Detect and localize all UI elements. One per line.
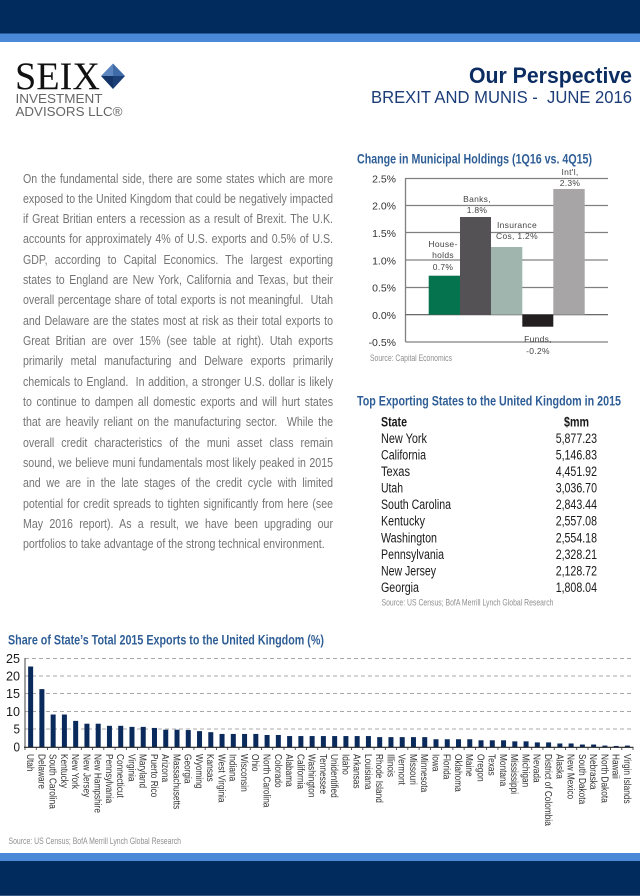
table: top exporting states: New York — [381, 431, 427, 446]
bar chart: change in municipal holdings: 2.3% — [560, 178, 580, 188]
bar chart: share of state exports: Kansas — [205, 754, 216, 782]
logo: Seix Investment Advisors — [15, 55, 125, 119]
table: top exporting states: Georgia — [381, 580, 419, 595]
bar chart: share of state exports: Tennessee — [318, 754, 328, 794]
body text — [23, 170, 333, 551]
table: top exporting states: Pennsylvania — [381, 547, 444, 562]
body text: primarily metal manufacturing and Delware exports primarily — [23, 353, 333, 368]
bar chart: share of state exports: 20 — [6, 670, 20, 684]
body text: and Delaware are the states most at risk as their total exports to — [23, 313, 333, 328]
bar chart: share of state exports: Mississippi — [509, 754, 520, 794]
bar chart: change in municipal holdings: -0.2% — [526, 346, 550, 356]
body text: overall percentage share of total exports is not meaningful. Utah — [23, 292, 333, 307]
bar chart: share of state exports: Alaska — [554, 754, 565, 780]
bar chart: change in municipal holdings: House- — [428, 239, 458, 249]
bar chart: share of state exports: 10 — [6, 705, 20, 719]
body text: GDP, according to Capital Economics. The largest exporting — [23, 252, 333, 267]
logo: Seix Investment Advisors: ADVISORS LLC® — [16, 105, 123, 119]
bar chart: share of state exports: 25 — [6, 652, 20, 666]
bar chart: share of state exports: Idaho — [340, 754, 351, 775]
bar chart: share of state exports: West Virginia — [216, 754, 227, 803]
bar chart: share of state exports: Maine — [464, 754, 475, 777]
table: top exporting states: New Jersey — [381, 563, 436, 578]
bar chart: share of state exports: New Mexico — [565, 754, 576, 799]
table: top exporting states: $mm — [564, 414, 589, 430]
table: top exporting states: Kentucky — [381, 514, 425, 529]
body text: portfolios to take advantage of the strong technical environment. — [23, 536, 325, 551]
body text: that are heavily reliant on the manufacturing sector. While the — [23, 414, 333, 429]
body text: exposed to the United Kingdom that could be negatively impacted — [23, 191, 333, 206]
bar chart: share of state exports: Oklahoma — [453, 754, 464, 793]
bar chart: share of state exports: Florida — [441, 754, 452, 780]
bar chart: share of state exports: Nevada — [532, 754, 542, 783]
bar chart: share of state exports: Virginia — [126, 754, 137, 782]
heading: share of state exports: Share of State’s Total 2015 Exports to the United Kingdom (%) — [8, 632, 324, 648]
bar chart: share of state exports: Nebraska — [588, 754, 599, 790]
bar chart: share of state exports: Illinois — [385, 754, 396, 777]
bar chart: share of state exports: North Dakota — [599, 754, 610, 804]
body text: overall credit characteristics of the muni asset class remain — [23, 435, 333, 450]
bar chart: share of state exports: Vermont — [396, 754, 407, 785]
bar chart: change in municipal holdings: Banks, — [463, 194, 491, 204]
body text: sound, we believe muni fundamentals most likely peaked in 2015 — [23, 455, 333, 470]
bar chart: share of state exports: Indiana — [228, 754, 238, 782]
bottom banner — [0, 853, 640, 896]
bar chart: share of state exports: Unidentified — [329, 754, 340, 798]
bar chart: share of state exports: Virgin Islands — [622, 754, 633, 804]
table: top exporting states — [381, 414, 597, 595]
bar chart: share of state exports: Utah — [25, 754, 36, 771]
body text: potential for credit spreads to tighten significantly from here (see — [23, 496, 333, 511]
bar chart: share of state exports: Ohio — [250, 754, 261, 771]
bar chart: share of state exports: Massachusetts — [171, 754, 182, 810]
table: top exporting states: 1,808.04 — [556, 580, 597, 595]
bar chart: share of state exports: Montana — [498, 754, 509, 787]
source: capital economics: Source: Capital Economics — [370, 353, 452, 363]
table: top exporting states: 2,554.18 — [556, 530, 597, 545]
bar chart: share of state exports: New Jersey — [81, 754, 92, 798]
bar chart: share of state exports: Texas — [487, 754, 497, 776]
table: top exporting states: 5,877.23 — [556, 431, 597, 446]
top banner — [0, 0, 640, 42]
logo: Seix Investment Advisors: SEIX — [15, 55, 100, 98]
bar chart: share of state exports: Michigan — [520, 754, 531, 787]
bar chart: change in municipal holdings: 0.0% — [372, 310, 396, 322]
table: top exporting states: South Carolina — [381, 497, 451, 512]
bar chart: share of state exports: Delaware — [36, 754, 47, 789]
source: us census table: Source: US Census; BofA Merrill Lynch Global Research — [382, 598, 554, 608]
table: top exporting states: 2,328.21 — [556, 547, 597, 562]
body text: On the fundamental side, there are some states which are more — [23, 170, 333, 186]
bar chart: share of state exports: New Hampshire — [92, 754, 103, 813]
bar chart: change in municipal holdings: 0.5% — [372, 282, 396, 294]
bar chart: share of state exports: Minnesota — [419, 754, 430, 793]
bar chart: change in municipal holdings: 2.5% — [372, 174, 396, 186]
bar chart: share of state exports: Connecticut — [115, 754, 126, 798]
bar chart: share of state exports: Arkansas — [351, 754, 362, 789]
bar chart: share of state exports: Oregon — [475, 754, 486, 782]
bar chart: change in municipal holdings: Insurance — [497, 220, 537, 230]
bar chart: change in municipal holdings — [369, 167, 608, 356]
title: Our Perspective — [469, 63, 632, 88]
bar chart: share of state exports: Alabama — [284, 754, 295, 788]
table: top exporting states: Texas — [381, 464, 410, 479]
bar chart: share of state exports: 0 — [14, 740, 20, 754]
bar chart: share of state exports: Washington — [306, 754, 317, 797]
bar chart: share of state exports: 5 — [14, 722, 20, 736]
bar chart: share of state exports: Wyoming — [194, 754, 205, 788]
bar chart: share of state exports: District of Colombia — [543, 754, 554, 827]
body text: accounts for approximately 4% of U.S. exports and 0.5% of U.S. — [23, 231, 333, 246]
bar chart: share of state exports: New York — [70, 754, 81, 789]
body text: chemicals to England. In addition, a stronger U.S. dollar is likely — [23, 374, 333, 389]
title — [371, 63, 632, 107]
table: top exporting states: State — [381, 414, 407, 430]
table: top exporting states: 4,451.92 — [556, 464, 597, 479]
source: us census chart: Source: US Census; BofA Merrill Lynch Global Research — [8, 836, 181, 846]
bar chart: share of state exports: Hawaii — [610, 754, 621, 779]
bar chart: change in municipal holdings: Int'l, — [561, 167, 579, 177]
bar chart: share of state exports: Rhode Island — [374, 754, 385, 803]
table: top exporting states: Utah — [381, 481, 403, 496]
title: BREXIT AND MUNIS - JUNE 2016 — [371, 87, 632, 107]
bar chart: change in municipal holdings: 0.7% — [433, 262, 453, 272]
bar chart: share of state exports: Kentucky — [59, 754, 70, 788]
bar chart: share of state exports: Georgia — [182, 754, 193, 784]
bar chart: change in municipal holdings: -0.5% — [369, 337, 396, 349]
table: top exporting states: 2,843.44 — [556, 497, 597, 512]
bar chart: share of state exports: South Carolina — [47, 754, 58, 810]
body text: to continue to dampen all domestic exports and will hurt states — [23, 394, 333, 409]
table: top exporting states: 3,036.70 — [556, 481, 597, 496]
bar chart: share of state exports — [6, 652, 634, 827]
bar chart: change in municipal holdings: 2.0% — [372, 200, 396, 212]
bar chart: share of state exports: Arizona — [160, 754, 171, 783]
logo: Seix Investment Advisors: INVESTMENT — [16, 92, 103, 106]
bar chart: change in municipal holdings: 1.0% — [372, 256, 396, 268]
bar chart: share of state exports: Wisconsin — [239, 754, 250, 792]
bar chart: change in municipal holdings: holds — [432, 250, 454, 260]
table: top exporting states: Washington — [381, 530, 437, 545]
bar chart: change in municipal holdings: 1.5% — [372, 228, 396, 240]
bar chart: share of state exports: South Dakota — [577, 754, 587, 805]
bar chart: share of state exports: Pennsylvania — [104, 754, 115, 804]
bar chart: change in municipal holdings: 1.8% — [467, 205, 487, 215]
table: top exporting states: 2,557.08 — [556, 514, 597, 529]
bar chart: share of state exports: California — [295, 754, 306, 790]
body text: Great Britian are over 15% (see table at right). Utah exports — [23, 333, 333, 348]
bar chart: share of state exports: Puerto Rico — [149, 754, 160, 797]
table: top exporting states: California — [381, 448, 426, 462]
bar chart: share of state exports: Colorado — [273, 754, 283, 788]
bar chart: share of state exports: Louisiana — [363, 754, 374, 790]
bar chart: change in municipal holdings: Cos, 1.2% — [496, 231, 538, 241]
bar chart: share of state exports: 15 — [6, 687, 20, 701]
bar chart: share of state exports: Missouri — [408, 754, 419, 785]
table: top exporting states: 5,146.83 — [556, 448, 597, 462]
bar chart: change in municipal holdings: Funds, — [524, 334, 552, 344]
body text: if Great Britian enters a recession as a result of Brexit. The U.K. — [23, 211, 333, 226]
table: top exporting states: 2,128.72 — [556, 563, 597, 578]
body text: states to England are New York, California and Texas, but their — [23, 272, 333, 287]
bar chart: share of state exports: Iowa — [430, 754, 441, 772]
body text: May 2016 report). As a result, we have been upgrading our — [23, 516, 333, 531]
bar chart: share of state exports: North Carolina — [261, 754, 272, 808]
bar chart: share of state exports: Maryland — [137, 754, 148, 788]
body text: and we are in the late stages of the credit cycle with limited — [23, 475, 333, 490]
